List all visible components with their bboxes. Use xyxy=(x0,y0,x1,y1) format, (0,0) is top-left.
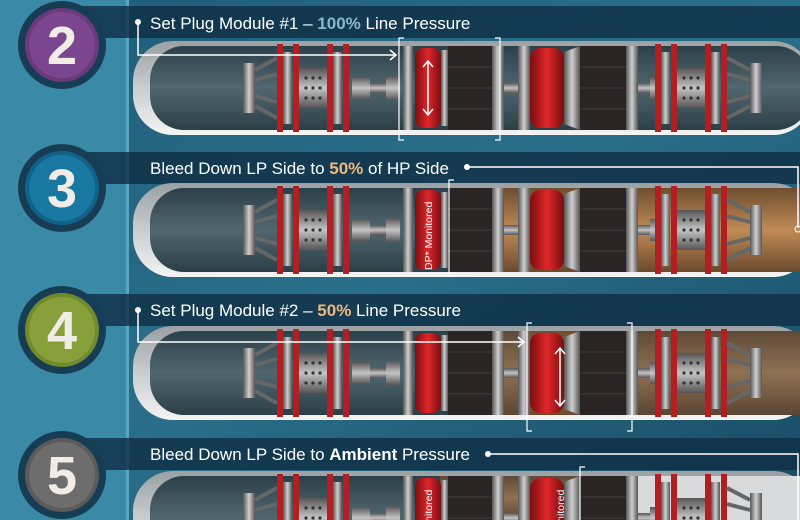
bracket 2 xyxy=(399,38,500,140)
connector line 2 xyxy=(138,22,396,60)
tool 2 xyxy=(243,44,762,132)
pipe 3 xyxy=(133,183,800,277)
bracket 4 xyxy=(527,323,632,431)
step 3 row xyxy=(40,152,800,277)
badge 2: 2 xyxy=(47,16,77,76)
tool 4 xyxy=(243,329,762,417)
step 4 row xyxy=(40,294,800,431)
arrow: up-down in module 1 xyxy=(423,61,433,115)
badge 5: 5 xyxy=(47,446,77,506)
pressure fill 5 xyxy=(440,476,580,520)
step 2 row xyxy=(40,6,800,140)
pressure fill 4 xyxy=(450,331,800,415)
left column xyxy=(0,0,128,520)
connector line 4 xyxy=(138,310,524,347)
title band 5 xyxy=(40,438,800,470)
pipe 2 xyxy=(133,41,800,135)
badge 5 xyxy=(18,431,106,519)
connector line 5 xyxy=(488,454,798,520)
title band 4 xyxy=(40,294,800,326)
pipe 5 xyxy=(133,471,800,520)
title band 3 xyxy=(40,152,800,184)
heading 5: Bleed Down LP Side to Ambient Pressure xyxy=(150,445,470,464)
heading 2: Set Plug Module #1 – 100% Line Pressure xyxy=(150,14,470,33)
badge 2 xyxy=(18,1,106,89)
DP label 3: DP* Monitored xyxy=(423,202,435,270)
heading 4: Set Plug Module #2 – 50% Line Pressure xyxy=(150,301,461,320)
badge 4: 4 xyxy=(47,301,77,361)
tool 3 xyxy=(243,186,762,274)
pressure fill 3 xyxy=(450,188,800,272)
pipe 4 xyxy=(133,326,800,420)
title band 2 xyxy=(40,6,800,38)
arrow: up-down in module 2 xyxy=(555,348,565,406)
connector line 3 xyxy=(467,167,798,228)
badge 4 xyxy=(18,286,106,374)
badge 3 xyxy=(18,144,106,232)
tool 5 xyxy=(243,474,762,520)
step 5 row xyxy=(40,438,800,520)
bracket 5 xyxy=(580,467,585,520)
badge 3: 3 xyxy=(47,159,77,219)
heading 3: Bleed Down LP Side to 50% of HP Side xyxy=(150,159,449,178)
bracket 3 xyxy=(449,180,454,276)
